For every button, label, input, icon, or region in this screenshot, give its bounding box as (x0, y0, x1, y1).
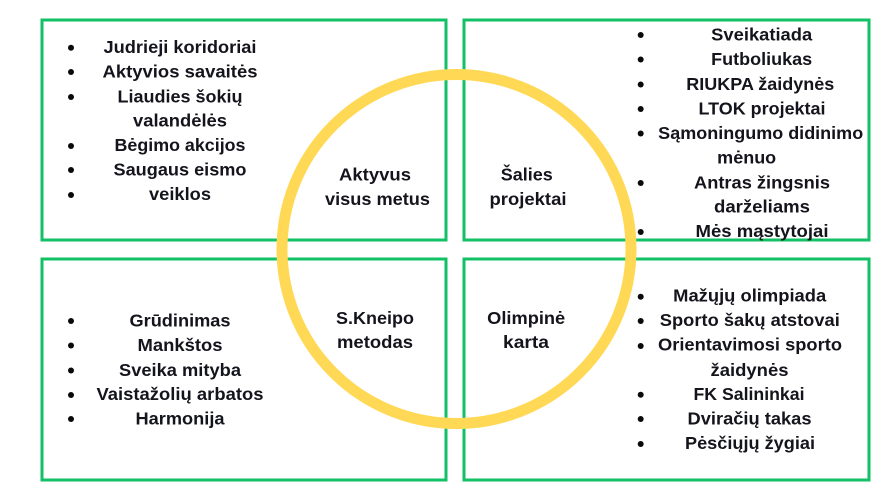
panel: bottom-right list: Mažųjų olimpiada (673, 286, 826, 306)
panel: bottom-left list: Sveika mityba (119, 360, 241, 380)
panel: bottom-left list: Mankštos (138, 335, 223, 355)
panel: top-left list: Aktyvios savaitės (102, 62, 258, 82)
label: Aktyvus visus metus: Aktyvus (339, 164, 411, 184)
central yellow ring (282, 74, 631, 424)
panel: bottom-right list (638, 286, 842, 453)
label: S.Kneipo metodas: metodas (337, 332, 413, 352)
panel: bottom-right list: žaidynės (710, 360, 789, 380)
panel: top-left list: Judrieji koridoriai (104, 37, 256, 57)
panel: top-right list: mėnuo (717, 148, 776, 168)
panel: top-left list: Liaudies šokių (118, 86, 242, 106)
panel: bottom-left list: Grūdinimas (130, 310, 231, 330)
panel: top-right list: Mės mąstytojai (696, 221, 828, 241)
panel: top-right list: LTOK projektai (698, 98, 826, 118)
label: Aktyvus visus metus: visus metus (325, 189, 430, 209)
label: S.Kneipo metodas: S.Kneipo (336, 308, 414, 328)
panel: top-right list: Sveikatiada (711, 24, 812, 44)
label: Olimpinė karta (487, 308, 565, 352)
panel: bottom-right list: FK Salininkai (694, 384, 804, 404)
panel: top-right list: Antras žingsnis (694, 172, 830, 192)
label: S.Kneipo metodas (336, 308, 414, 352)
panel: bottom-right list: Sporto šakų atstovai (660, 310, 840, 330)
panel: bottom-left list: Vaistažolių arbatos (96, 384, 264, 404)
panel: bottom-left list (68, 310, 264, 428)
label: Aktyvus visus metus (325, 164, 430, 209)
label: Šalies projektai: Šalies (501, 164, 553, 184)
panel: bottom-right list: Pėsčiųjų žygiai (685, 433, 815, 453)
panel: top-left list: valandėlės (133, 110, 227, 130)
panel: top-left list (68, 37, 258, 204)
panel: top-right list: RIUKPA žaidynės (686, 74, 835, 94)
label: Šalies projektai (490, 164, 566, 209)
label: Šalies projektai: projektai (490, 189, 566, 209)
panel: bottom-right list: Orientavimosi sporto (658, 334, 842, 354)
panel: bottom-right list: Dviračių takas (688, 408, 812, 428)
panel: bottom-left list: Harmonija (136, 408, 225, 428)
panel: top-right list: Sąmoningumo didinimo (658, 123, 863, 143)
panel: top-right list: Futboliukas (711, 49, 812, 69)
panel: top-left list: veiklos (149, 184, 211, 204)
panel: top-left list: Saugaus eismo (114, 160, 246, 180)
label: Olimpinė karta: Olimpinė (487, 308, 565, 328)
panel: top-right list: darželiams (714, 196, 810, 216)
panel: top-left list: Bėgimo akcijos (114, 135, 246, 155)
label: Olimpinė karta: karta (503, 332, 549, 352)
panel: top-right list (638, 24, 863, 241)
